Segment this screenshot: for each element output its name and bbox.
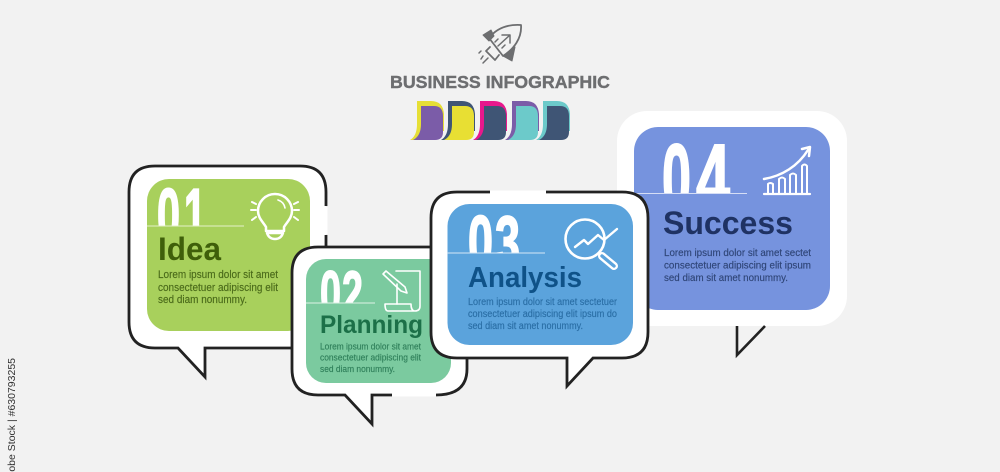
bubble tail: [737, 326, 765, 355]
body text: sed diam sit amet nonummy.: [664, 272, 788, 284]
body text: sed diam nonummy.: [320, 363, 395, 374]
panel: 03 analysis: [431, 191, 648, 386]
number 01: [158, 188, 200, 226]
white bubble: [617, 111, 847, 326]
body text: consectetuer adipiscing elit ipsum do: [468, 309, 617, 320]
coloured card: [147, 179, 310, 331]
number 02: [321, 270, 362, 302]
heading: Success: [663, 205, 793, 241]
body text: sed diam sit amet nonummy.: [468, 321, 583, 332]
coloured card: [634, 127, 830, 310]
body text: consectetuer adipiscing elit ipsum: [664, 260, 811, 272]
title: BUSINESS INFOGRAPHIC: [390, 72, 610, 92]
tab 4: [505, 101, 539, 140]
body text: Lorem ipsum dolor sit amet sectetuer: [468, 297, 618, 308]
tab 1: [410, 101, 444, 140]
number 01: 0: [157, 173, 180, 257]
speech bubble: [129, 166, 326, 377]
body text: Lorem ipsum dolor sit amet: [158, 269, 278, 281]
number 02: 0: [320, 259, 341, 329]
number 04: [664, 143, 730, 193]
icon: magnifier with trend: [566, 220, 617, 266]
speech bubble: [431, 192, 648, 386]
icon: light bulb: [251, 194, 299, 239]
body text: [664, 247, 811, 284]
body text: [158, 269, 278, 306]
body text: Lorem ipsum dolor sit amet sectet: [664, 247, 811, 259]
icon: paper and pen: [383, 271, 420, 311]
heading: Idea: [158, 231, 221, 267]
heading: Analysis: [468, 262, 582, 294]
body text: consectetuer adipiscing elit: [158, 282, 278, 294]
tab 5: [536, 101, 570, 140]
number 04: 4: [696, 124, 730, 233]
number 01: 1: [184, 173, 206, 257]
coloured card: [306, 259, 451, 383]
body text: [320, 340, 421, 374]
body text: sed diam nonummy.: [158, 294, 247, 306]
panel: 04 success: [617, 111, 847, 355]
number 03: 3: [495, 202, 520, 283]
number 03: 0: [468, 202, 493, 283]
coloured card: [448, 204, 633, 345]
colour tabs row: [410, 101, 570, 140]
speech bubble: [292, 247, 467, 424]
icon: growth chart: [764, 147, 810, 194]
body text: [468, 297, 618, 332]
number 04: 0: [662, 124, 691, 233]
panel: 02 planning: [292, 247, 467, 424]
heading: Planning: [320, 311, 423, 339]
icon: rocket: [479, 25, 521, 63]
body text: Lorem ipsum dolor sit amet: [320, 340, 421, 352]
number 03: [469, 214, 519, 252]
body text: consectetuer adipiscing elit: [320, 352, 421, 362]
tab 3: [473, 101, 507, 140]
tab 2: [441, 101, 475, 140]
number 02: 2: [342, 259, 363, 329]
panel: 01 idea: [129, 166, 328, 377]
